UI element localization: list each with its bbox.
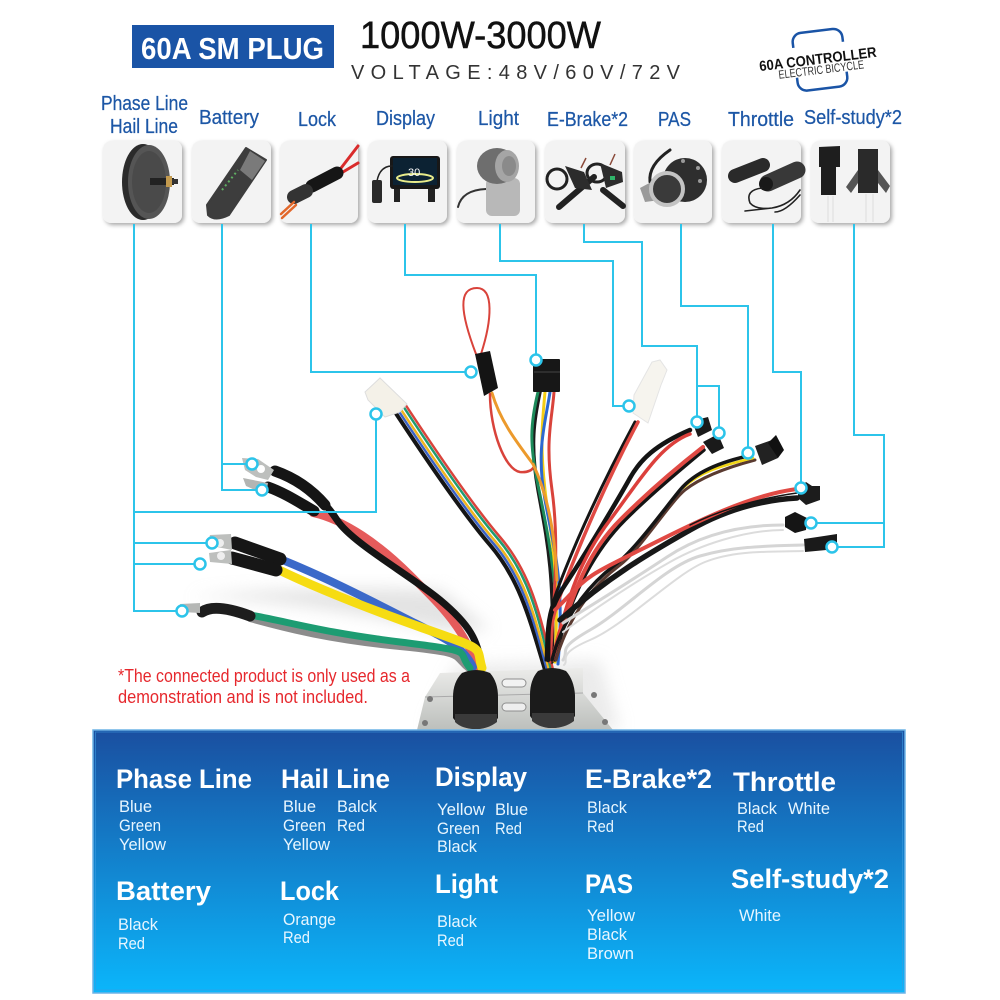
legend: self-study: Self-study*2 [731, 864, 889, 894]
top labels: Hail Line [110, 116, 178, 138]
wiring: throttle cable [555, 482, 820, 620]
legend: light: Black [437, 913, 478, 931]
disclaimer note: demonstration and is not included. [118, 687, 368, 707]
logo badge: 60A controller: ELECTRIC BICYCLE [778, 57, 865, 82]
legend: hail line: Green [283, 817, 326, 835]
wiring: e-brake cables [548, 417, 724, 660]
logo badge: 60A controller [752, 24, 883, 96]
panel: wire colour legend [93, 730, 905, 993]
legend: hail line: Blue [283, 798, 316, 816]
legend: battery: Black [118, 916, 159, 934]
legend: display: Red [495, 820, 522, 838]
tile: e-brake [545, 141, 625, 223]
tile: throttle [722, 141, 801, 223]
wiring: lock loop [463, 288, 534, 472]
legend: PAS: Yellow [587, 907, 635, 925]
disclaimer note [118, 666, 411, 707]
legend: phase line: Blue [119, 798, 152, 816]
legend: lock: Orange [283, 911, 336, 929]
legend: battery [116, 876, 211, 953]
legend: PAS: PAS [585, 869, 633, 899]
soft shadows behind wiring [190, 589, 620, 730]
legend: lock: Lock [280, 876, 340, 906]
legend: hail line: Yellow [283, 836, 330, 854]
legend: lock: Red [283, 929, 310, 947]
legend: display: Blue [495, 801, 528, 819]
legend: hail line: Hail Line [281, 764, 390, 794]
legend: display: Yellow [437, 801, 485, 819]
legend: hail line: Red [337, 817, 365, 835]
wiring: self-study cables [563, 512, 837, 665]
legend: throttle: White [788, 800, 830, 818]
legend: e-brake: E-Brake*2 [585, 764, 712, 794]
legend: display [435, 762, 528, 856]
legend: display: Display [435, 762, 527, 792]
top labels: Throttle [728, 109, 794, 131]
tile: self-study [811, 141, 890, 223]
legend: phase line: Green [119, 817, 161, 835]
legend: display: Black [437, 838, 478, 856]
top labels: PAS [658, 109, 691, 131]
wiring: PAS cable [552, 435, 784, 660]
legend: e-brake: Black [587, 799, 628, 817]
legend: hail line [281, 764, 390, 854]
legend: throttle: Red [737, 818, 764, 836]
title: power range: 1000W-3000W [360, 15, 601, 57]
tile: battery [192, 141, 271, 223]
legend: phase line [116, 764, 252, 854]
legend: display: Green [437, 820, 480, 838]
connector dots [176, 354, 838, 616]
top labels: E-Brake*2 [547, 109, 628, 131]
controller bracket with cable glands [417, 668, 613, 730]
legend: e-brake: Red [587, 818, 614, 836]
header badge: 60A SM PLUG: 60A SM PLUG [141, 31, 324, 66]
top labels: Lock [298, 109, 337, 131]
legend: throttle: Throttle [733, 767, 836, 797]
top labels: Display [376, 108, 435, 130]
legend: light [435, 869, 498, 950]
tile: motor [103, 141, 182, 223]
top labels: Phase Line [101, 93, 188, 115]
subtitle: voltage: VOLTAGE:48V/60V/72V [351, 62, 681, 84]
wiring: display harness [532, 359, 560, 664]
top labels: Light [478, 108, 519, 130]
legend: phase line: Phase Line [116, 764, 252, 794]
legend: light: Light [435, 869, 498, 899]
tile: PAS [634, 141, 712, 223]
legend: PAS: Black [587, 926, 628, 944]
tile: display: 30 [408, 167, 420, 179]
tile: lock [280, 141, 358, 223]
connector lines: cyan routing [134, 224, 884, 611]
disclaimer note: *The connected product is only used as a [118, 666, 411, 686]
legend: lock [280, 876, 340, 947]
legend: e-brake [585, 764, 712, 836]
wiring: battery cables [242, 458, 482, 668]
legend: PAS: Brown [587, 945, 634, 963]
wiring: light cable [546, 360, 667, 660]
legend: light: Red [437, 932, 464, 950]
legend: phase line: Yellow [119, 836, 166, 854]
top labels: Self-study*2 [804, 107, 902, 129]
legend: battery: Red [118, 935, 145, 953]
tile: display [368, 141, 447, 223]
legend: hail line: Balck [337, 798, 378, 816]
legend: throttle [733, 767, 836, 836]
legend: PAS [585, 869, 635, 963]
legend: self-study: White [739, 907, 781, 925]
legend: self-study [731, 864, 889, 925]
top labels [101, 93, 902, 138]
wiring: phase cables [180, 534, 482, 670]
logo badge: 60A controller: 60A CONTROLLER [758, 45, 878, 75]
tile: light [457, 141, 535, 223]
legend: battery: Battery [116, 876, 211, 906]
wiring: hall harness [365, 378, 553, 670]
legend: throttle: Black [737, 800, 778, 818]
top labels: Battery [199, 107, 259, 129]
